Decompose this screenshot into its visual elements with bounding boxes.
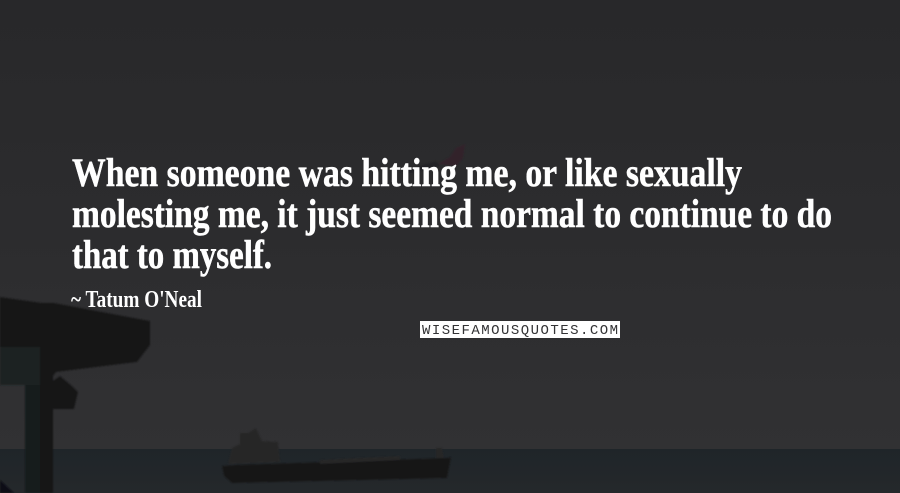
attribution: ~ Tatum O'Neal: [71, 287, 202, 313]
quote text: [72, 150, 832, 277]
cargo ship silhouette: [222, 428, 451, 483]
airplane tail silhouette: [400, 144, 465, 173]
watermark badge: WISEFAMOUSQUOTES.COM: [422, 323, 618, 339]
quote line 1: When someone was hitting me, or like sexually: [72, 150, 742, 195]
hanging lantern: [48, 376, 78, 409]
quote line 3: that to myself.: [72, 232, 272, 277]
background sea: [0, 449, 900, 493]
pavilion roof and post silhouette: [0, 297, 150, 493]
